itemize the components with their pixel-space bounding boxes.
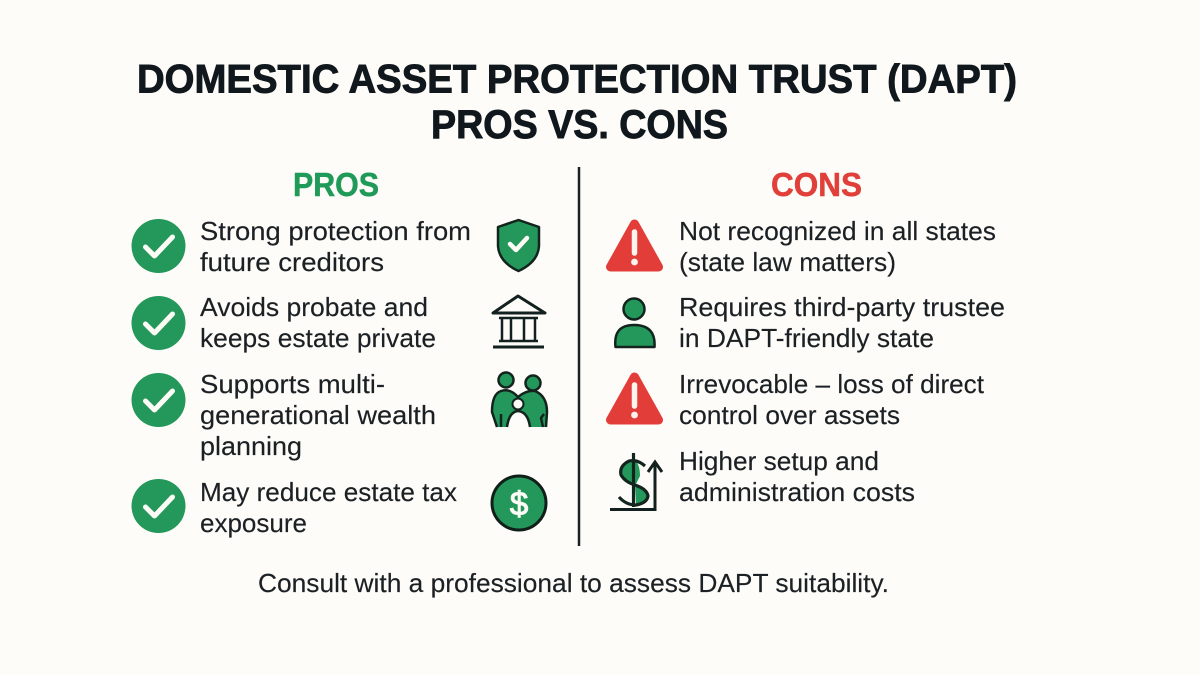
con item: third-party trustee: Requires third-party trustee	[679, 292, 1005, 322]
con item: higher costs: administration costs	[679, 477, 915, 507]
pro item: multi-generational wealth: Supports multi-	[200, 369, 385, 399]
icon: family	[492, 372, 547, 427]
title: PROS VS. CONS	[431, 103, 728, 147]
pro item: avoids probate	[132, 292, 545, 353]
heading: cons: CONS	[771, 166, 862, 203]
con item: third-party trustee	[615, 292, 1005, 353]
divider	[578, 167, 580, 546]
icon: warning triangle	[610, 224, 658, 267]
panel: pros	[132, 166, 547, 538]
pro item: avoids probate: Avoids probate and	[200, 292, 428, 322]
icon: person	[615, 298, 655, 347]
pro item: avoids probate: keeps estate private	[200, 323, 436, 353]
pro item: multi-generational wealth: planning	[200, 431, 302, 461]
con item: irrevocable: Irrevocable – loss of direct	[679, 369, 985, 399]
icon: warning triangle	[610, 377, 658, 420]
con item: higher costs	[610, 446, 915, 510]
con item: irrevocable: control over assets	[679, 400, 900, 430]
con item: not recognized	[610, 216, 996, 277]
pro item: multi-generational wealth: generational wealth	[200, 400, 436, 430]
title	[137, 58, 1017, 147]
footer note: Consult with a professional to assess DAPT suitability.	[258, 568, 889, 598]
pro item: estate tax: May reduce estate tax	[200, 477, 457, 507]
pro item: estate tax: exposure	[200, 508, 307, 538]
title: DOMESTIC ASSET PROTECTION TRUST (DAPT)	[137, 58, 1017, 102]
pro item: multi-generational wealth	[132, 369, 547, 461]
con item: higher costs: Higher setup and	[679, 446, 879, 476]
con item: not recognized: Not recognized in all states	[679, 216, 996, 246]
pro item: estate tax	[132, 476, 546, 538]
panel: cons	[610, 166, 1005, 510]
icon: shield	[498, 220, 539, 271]
con item: irrevocable	[610, 369, 985, 430]
pro item: creditor protection: future creditors	[200, 247, 384, 277]
pro item: creditor protection	[132, 216, 539, 277]
con item: not recognized: (state law matters)	[679, 247, 896, 277]
con item: third-party trustee: in DAPT-friendly state	[679, 323, 934, 353]
icon: rising cost	[610, 453, 662, 510]
pro item: creditor protection: Strong protection from	[200, 216, 471, 246]
heading: pros: PROS	[293, 166, 379, 203]
icon: bank building	[493, 296, 545, 347]
icon: dollar coin: $	[510, 485, 528, 522]
icon: dollar coin	[492, 476, 546, 530]
